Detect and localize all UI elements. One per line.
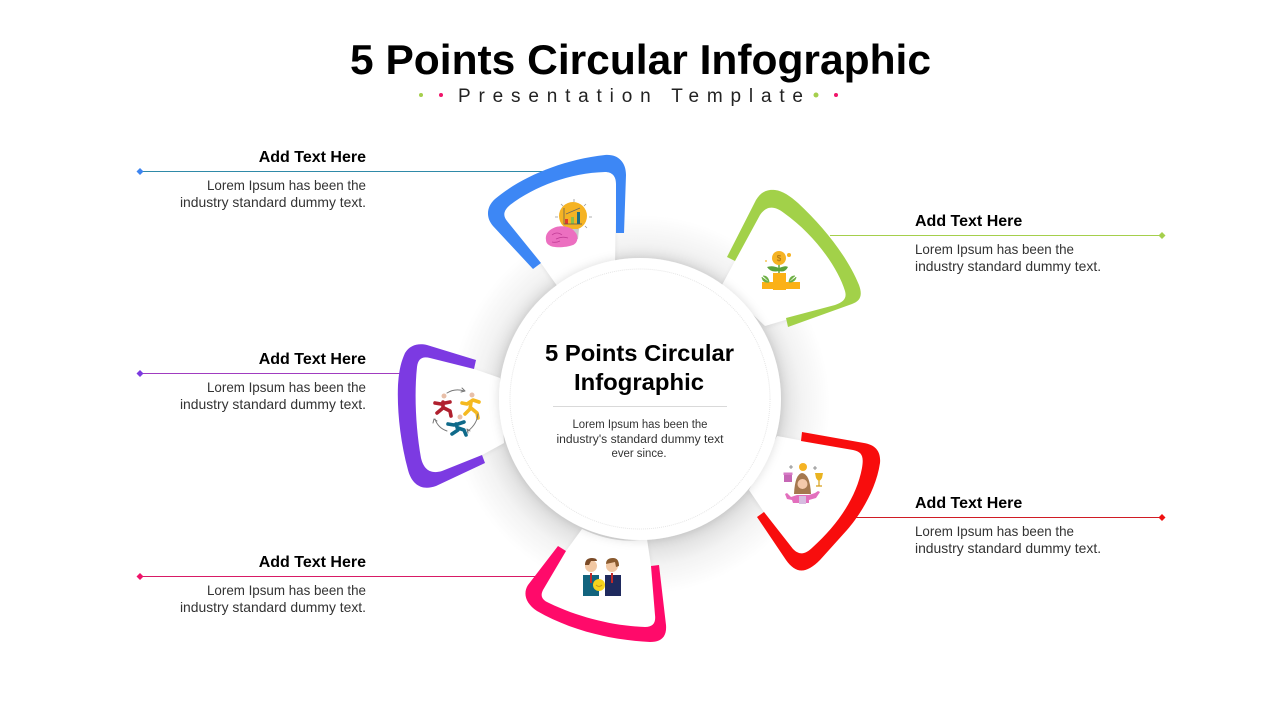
icon: coin plant: $ [777, 254, 782, 263]
centre divider and text: Lorem Ipsum has been the [572, 419, 708, 431]
panel: centre circle [499, 258, 781, 540]
panel: red segment [749, 432, 880, 570]
centre divider and text [553, 406, 727, 460]
text block: bottom left: industry standard dummy text. [180, 599, 366, 615]
connector: purple [136, 370, 405, 377]
background glow [450, 215, 830, 595]
subtitle dots [419, 92, 838, 98]
text block: middle left [180, 351, 366, 412]
icon: brain and light bulb [546, 199, 592, 247]
title: 5 Points Circular Infographic [350, 36, 931, 83]
centre divider and text: industry's standard dummy text [556, 434, 724, 446]
text block: top right: Add Text Here [915, 213, 1022, 230]
connector: red [855, 514, 1166, 521]
panel: green segment [722, 190, 861, 327]
text block: top left: Add Text Here [259, 149, 366, 166]
connector: blue [136, 168, 545, 175]
text block: bottom right [915, 495, 1101, 556]
text block: top right: industry standard dummy text. [915, 258, 1101, 274]
icon: three runners [433, 388, 479, 435]
centre divider and text: ever since. [612, 448, 666, 460]
panel: blue segment [488, 155, 626, 290]
centre heading line 2: Infographic [574, 369, 704, 395]
panel: pink segment [525, 529, 666, 642]
text block: top right [915, 213, 1101, 274]
icon: woman with rewards [784, 463, 823, 504]
text block: middle left: Lorem Ipsum has been the [207, 379, 366, 395]
text block: bottom left [180, 554, 366, 615]
text block: bottom right: Lorem Ipsum has been the [915, 523, 1074, 539]
text block: bottom right: industry standard dummy text. [915, 540, 1101, 556]
text block: top left [180, 149, 366, 210]
text block: bottom left: Lorem Ipsum has been the [207, 582, 366, 598]
connector: pink [136, 573, 535, 580]
text block: middle left: industry standard dummy text. [180, 396, 366, 412]
text block: top left: industry standard dummy text. [180, 194, 366, 210]
text block: bottom left: Add Text Here [259, 554, 366, 571]
panel: purple segment [398, 344, 504, 488]
subtitle: Presentation Template [458, 86, 803, 107]
text block: top right: Lorem Ipsum has been the [915, 241, 1074, 257]
icon: business handshake [583, 558, 621, 596]
connector: green [830, 232, 1166, 239]
centre heading: 5 Points Circular [545, 340, 734, 366]
text block: top left: Lorem Ipsum has been the [207, 177, 366, 193]
text block: middle left: Add Text Here [259, 351, 366, 368]
text block: bottom right: Add Text Here [915, 495, 1022, 512]
